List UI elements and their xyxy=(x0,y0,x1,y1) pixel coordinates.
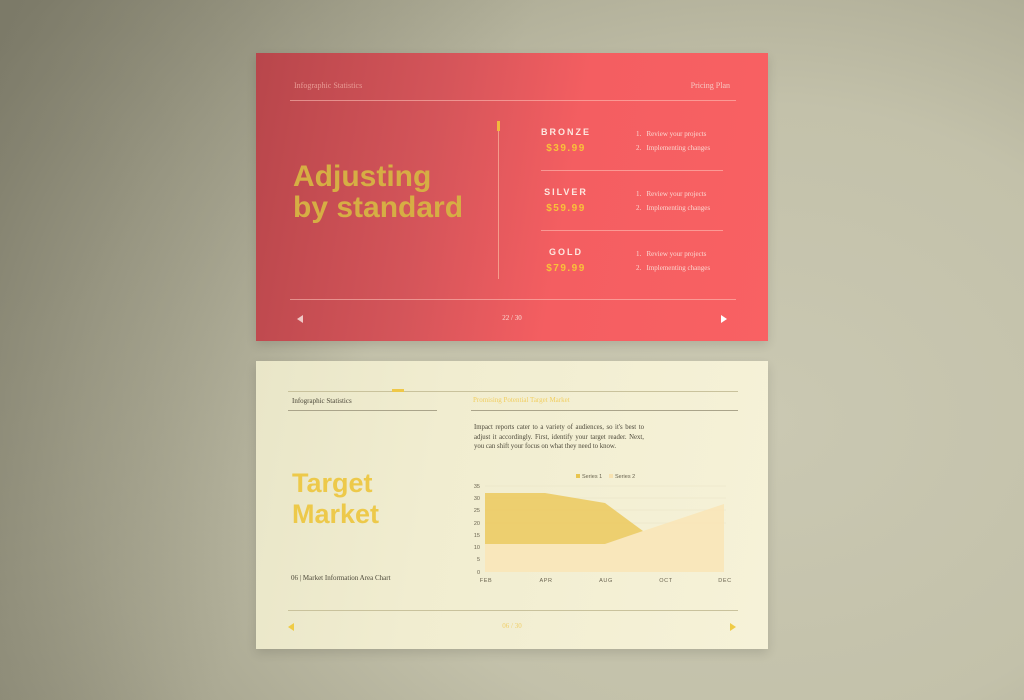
legend: Series 1 xyxy=(582,474,602,480)
title: Market xyxy=(292,499,379,529)
tier: bronze: $39.99 xyxy=(546,143,586,154)
x axis labels: FEB xyxy=(480,578,492,584)
y axis labels: 35 xyxy=(474,484,480,490)
nav: next arrow xyxy=(721,315,727,323)
x axis labels xyxy=(480,578,732,584)
page number: 22 / 30 xyxy=(502,314,522,322)
title xyxy=(293,160,463,224)
series 1 area xyxy=(485,493,643,544)
header right text: Pricing Plan xyxy=(691,81,730,90)
legend xyxy=(576,474,635,480)
vertical divider with marker xyxy=(497,121,500,279)
panel: target market card xyxy=(256,361,768,649)
tier: silver xyxy=(544,187,710,214)
y axis labels xyxy=(474,484,480,576)
y axis labels: 5 xyxy=(477,557,480,563)
x axis labels: OCT xyxy=(659,578,673,584)
y axis labels: 25 xyxy=(474,508,480,514)
tier: bronze: 2. Implementing changes xyxy=(636,144,710,152)
y axis labels: 15 xyxy=(474,533,480,539)
x axis labels: APR xyxy=(539,578,553,584)
tier: silver: SILVER xyxy=(544,187,588,197)
series 2 area xyxy=(485,504,724,572)
tier: gold: GOLD xyxy=(549,247,583,257)
tier: bronze xyxy=(541,127,710,154)
tier: gold: 2. Implementing changes xyxy=(636,264,710,272)
tier: gold: $79.99 xyxy=(546,263,586,274)
legend: Series 2 xyxy=(615,474,635,480)
tier: silver: 1. Review your projects xyxy=(636,190,706,198)
title: by standard xyxy=(293,191,463,224)
tier: bronze: 1. Review your projects xyxy=(636,130,706,138)
header left text: Infographic Statistics xyxy=(292,397,352,405)
nav: prev arrow xyxy=(297,315,303,323)
y axis labels: 30 xyxy=(474,496,480,502)
title xyxy=(292,468,379,529)
tier: silver: 2. Implementing changes xyxy=(636,204,710,212)
title: Adjusting xyxy=(293,160,431,193)
header left text: Infographic Statistics xyxy=(294,81,362,90)
title: Target xyxy=(292,468,373,498)
x axis labels: AUG xyxy=(599,578,613,584)
y axis labels: 20 xyxy=(474,521,480,527)
header right text: Promising Potential Target Market xyxy=(473,396,570,404)
caption: 06 | Market Information Area Chart xyxy=(291,574,391,582)
nav: prev arrow xyxy=(288,623,294,631)
nav: next arrow xyxy=(730,623,736,631)
area chart xyxy=(474,474,732,584)
y axis labels: 0 xyxy=(477,570,480,576)
tier: gold: 1. Review your projects xyxy=(636,250,706,258)
x axis labels: DEC xyxy=(718,578,732,584)
tier: silver: $59.99 xyxy=(546,203,586,214)
paragraph: Impact reports cater to a variety of audiences, so it's best to adjust it accordingly. First, identify your target reader. Next, you can shift your focus on what they need to know. xyxy=(474,424,644,450)
tier: bronze: BRONZE xyxy=(541,127,591,137)
y axis labels: 10 xyxy=(474,545,480,551)
page number: 06 / 30 xyxy=(502,622,522,630)
panel: pricing plan card xyxy=(256,53,768,341)
tier: gold xyxy=(546,247,710,274)
